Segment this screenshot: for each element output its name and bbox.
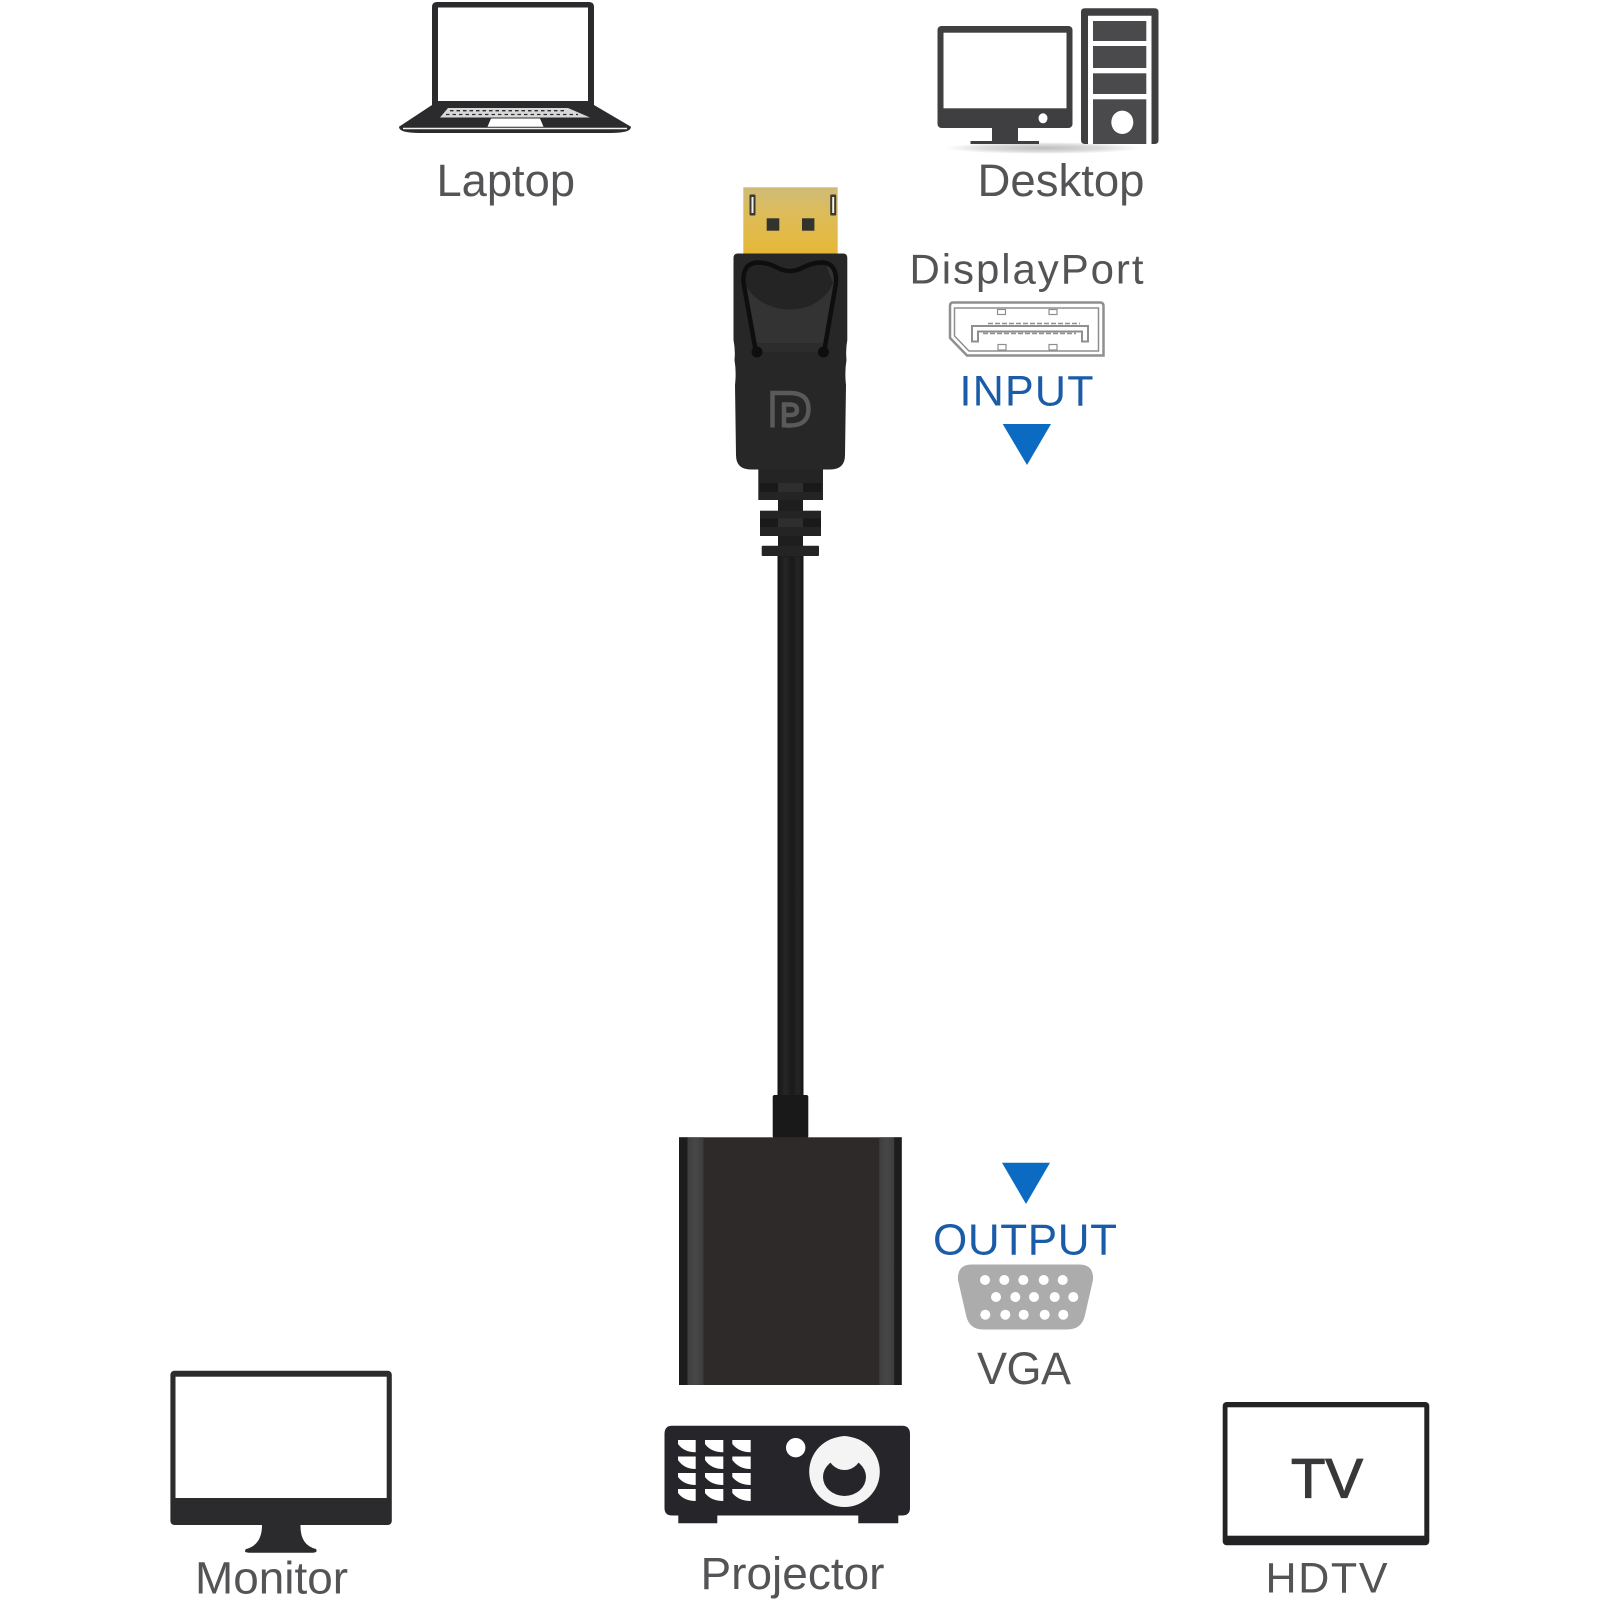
label: Projector: Projector — [700, 1548, 885, 1599]
label: VGA: VGA — [977, 1343, 1071, 1394]
cable — [778, 550, 804, 1100]
VGA adapter housing — [679, 1095, 902, 1385]
icon: VGA port — [958, 1264, 1093, 1330]
desktop tower — [1081, 8, 1158, 144]
DisplayPort plug and cable — [734, 187, 847, 1100]
desktop monitor — [938, 26, 1072, 144]
icon: monitor — [170, 1371, 392, 1553]
adapter body — [679, 1137, 902, 1385]
projector lens — [809, 1436, 880, 1507]
projector vents — [678, 1440, 751, 1501]
adapter collar — [773, 1095, 808, 1138]
strain relief — [758, 468, 823, 557]
desktop shadow — [945, 142, 1141, 154]
label: INPUT: INPUT — [960, 368, 1094, 416]
plug housing — [734, 254, 847, 470]
arrow: output direction — [1002, 1163, 1050, 1204]
icon: TV — [1223, 1402, 1429, 1545]
icon: desktop computer — [938, 8, 1158, 154]
label: Desktop: Desktop — [978, 155, 1144, 206]
icon: laptop — [399, 2, 631, 133]
label: OUTPUT: OUTPUT — [933, 1216, 1117, 1264]
icon: projector — [664, 1426, 910, 1523]
icon: DisplayPort port outline — [950, 302, 1104, 356]
label: DisplayPort: DisplayPort — [910, 246, 1144, 292]
arrow: input direction — [1003, 424, 1051, 465]
gold connector tip — [743, 187, 838, 254]
icon: TV: TV — [1291, 1447, 1364, 1510]
latch — [743, 262, 836, 358]
label: Laptop: Laptop — [436, 155, 575, 206]
DP logo — [772, 393, 808, 428]
